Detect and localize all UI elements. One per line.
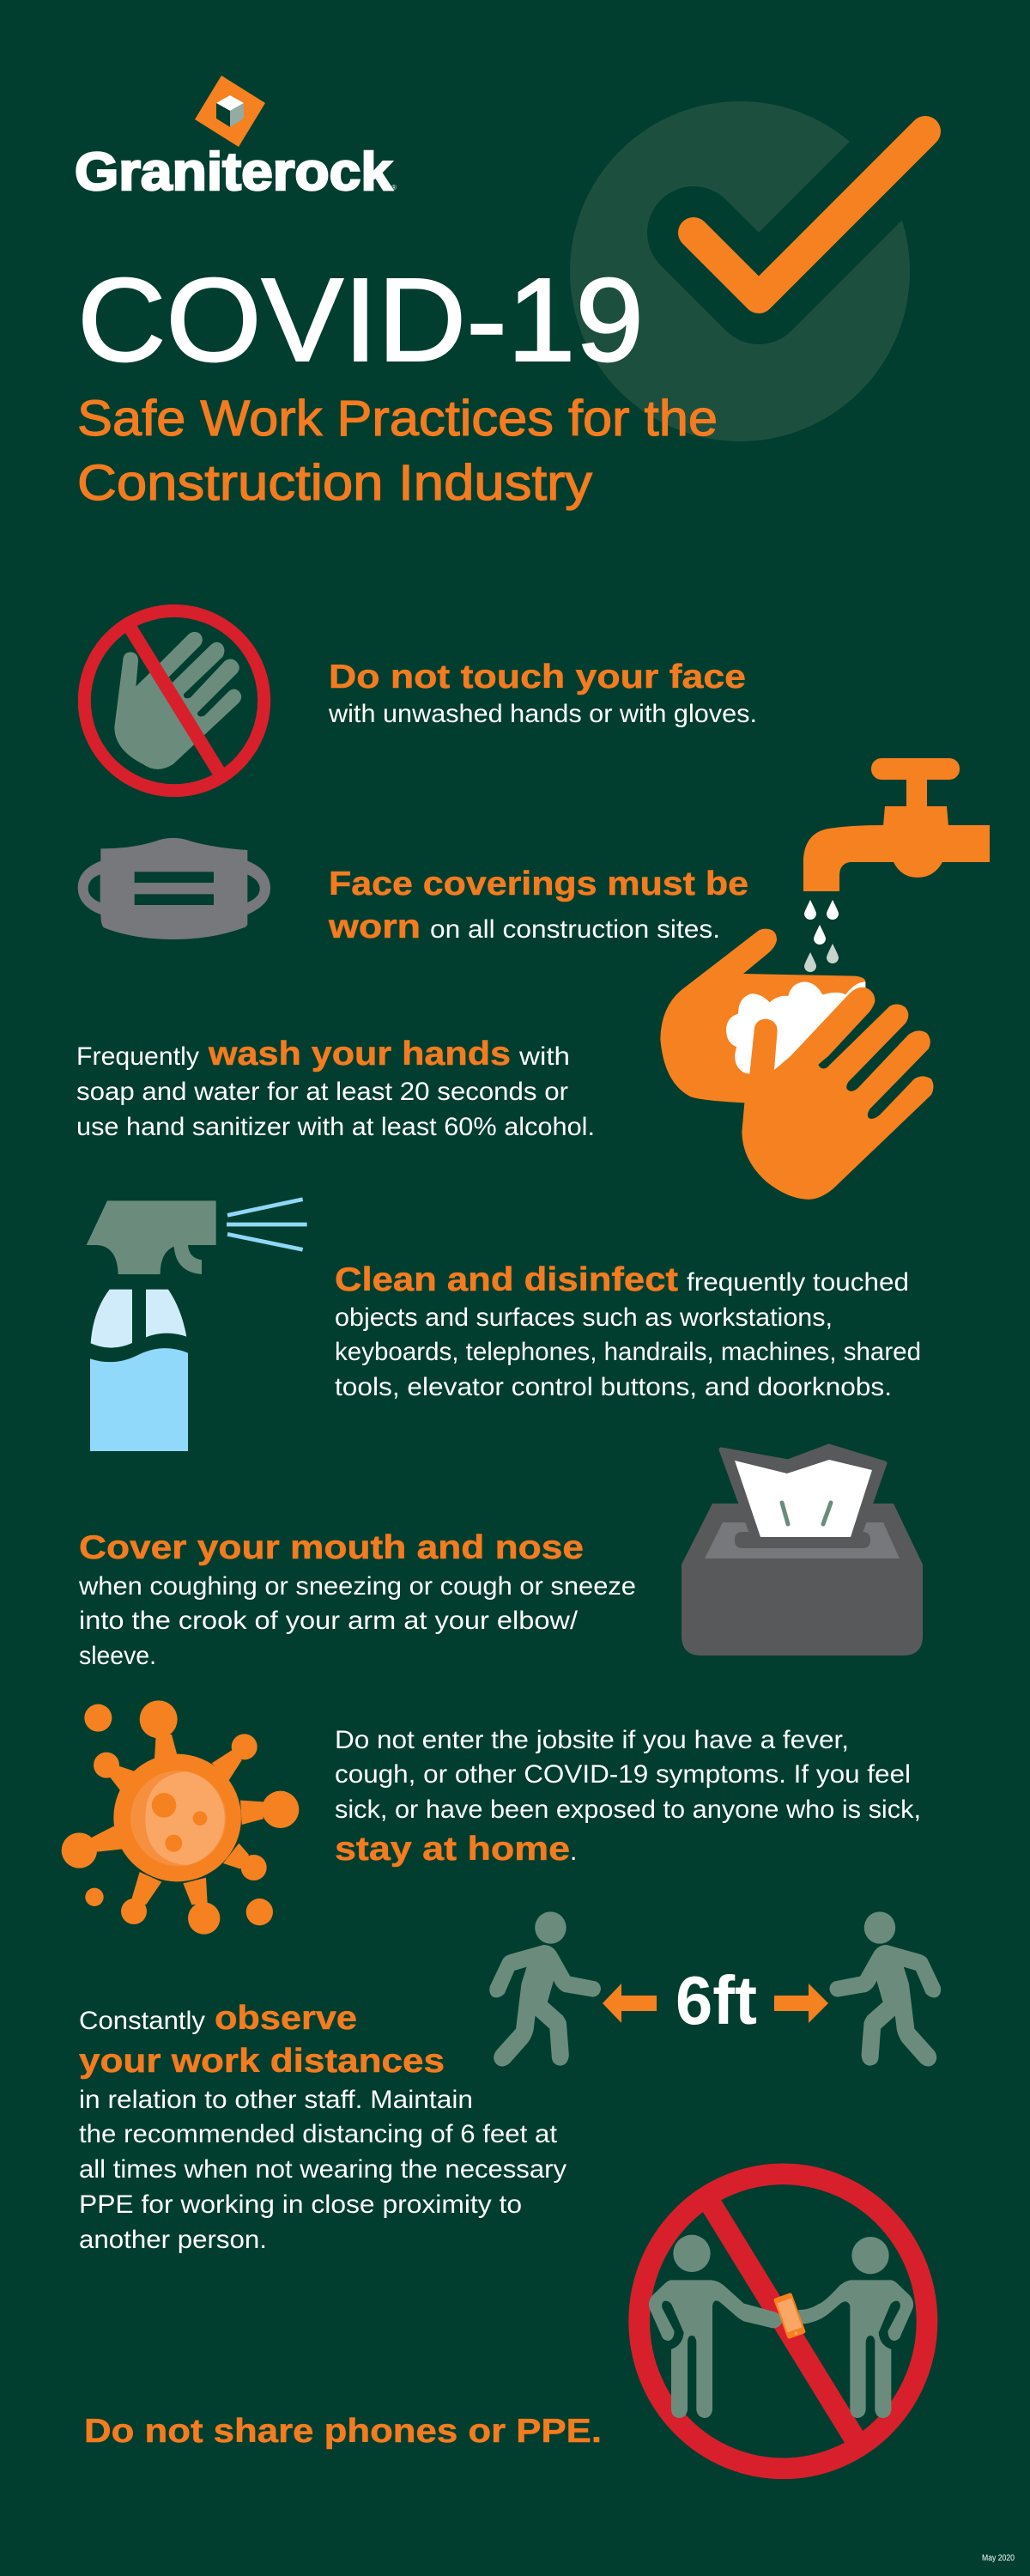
icon: do not share <box>639 2174 927 2469</box>
title: COVID-19 <box>77 254 644 386</box>
text: stay at home: sick, or have been exposed to anyone who is sick, <box>335 1795 921 1824</box>
text: face coverings <box>328 866 748 945</box>
text: stay at home: Do not enter the jobsite if you have a fever, <box>335 1726 849 1754</box>
icon: walking person left <box>489 1911 601 2067</box>
text: face coverings: worn <box>328 908 421 945</box>
text: stay at home <box>335 1726 921 1868</box>
icon: do not touch face <box>84 611 264 791</box>
icon: tissue box <box>682 1446 923 1656</box>
text: clean and disinfect: objects and surfaces such as workstations, <box>335 1303 833 1332</box>
text: face coverings: Face coverings must be <box>329 866 748 902</box>
text: clean and disinfect: keyboards, telephones, handrails, machines, shared <box>335 1338 921 1366</box>
text: wash your hands: soap and water for at least 20 seconds or <box>76 1078 568 1106</box>
text: observe your work distances: observe <box>215 2000 357 2037</box>
text: observe your work distances: your work distances <box>79 2043 445 2080</box>
text: observe your work distances: PPE for working in close proximity to <box>79 2190 522 2219</box>
text: stay at home: stay at home <box>335 1831 570 1868</box>
icon: washing hands <box>660 929 933 1200</box>
text: clean and disinfect: Clean and disinfect <box>335 1261 678 1298</box>
text: clean and disinfect <box>335 1261 921 1401</box>
subtitle: Construction Industry <box>77 455 592 511</box>
arrow: right <box>774 1984 828 2023</box>
text: do not touch your face: Do not touch your face <box>329 659 746 696</box>
subtitle: Safe Work Practices for the <box>77 391 718 447</box>
text: wash your hands: with <box>518 1042 570 1071</box>
logo: Graniterock <box>75 76 397 202</box>
arrow: left <box>603 1984 657 2023</box>
text: wash your hands: use hand sanitizer with at least 60% alcohol. <box>76 1113 595 1141</box>
text: cover your mouth and nose <box>78 1529 636 1670</box>
text: observe your work distances: in relation to other staff. Maintain <box>79 2086 473 2114</box>
icon: faucet <box>803 758 990 891</box>
text: cover your mouth and nose: sleeve. <box>79 1642 156 1670</box>
text: wash your hands: Frequently <box>76 1042 199 1071</box>
text: observe your work distances: Constantly <box>79 2007 205 2035</box>
text: observe your work distances <box>79 2000 566 2254</box>
logo: Graniterock: Graniterock <box>75 143 393 202</box>
icon: face mask <box>78 838 270 939</box>
text: do not touch your face: with unwashed hands or with gloves. <box>328 700 757 728</box>
text: wash your hands <box>76 1036 595 1141</box>
logo: Graniterock: ® <box>391 184 397 191</box>
text: do not share phones or PPE: Do not share phones or PPE. <box>84 2413 602 2450</box>
subtitle <box>77 391 718 511</box>
text: cover your mouth and nose: when coughing or sneezing or cough or sneeze <box>78 1572 636 1601</box>
icon: virus <box>62 1700 299 1935</box>
text: wash your hands: wash your hands <box>208 1036 511 1072</box>
distance label: 6ft <box>676 1962 757 2038</box>
text: observe your work distances: the recommended distancing of 6 feet at <box>79 2120 558 2148</box>
icon: walking person right <box>829 1911 941 2067</box>
text: do not touch your face <box>328 659 757 728</box>
icon: water drops <box>804 900 839 972</box>
text: observe your work distances: all times when not wearing the necessary <box>79 2155 566 2184</box>
text: clean and disinfect: tools, elevator control buttons, and doorknobs. <box>335 1373 892 1401</box>
text: clean and disinfect: frequently touched <box>687 1268 909 1297</box>
icon: checkmark badge <box>570 44 1013 441</box>
text: face coverings: on all construction sites. <box>430 915 720 944</box>
text: stay at home: . <box>570 1838 577 1866</box>
icon: spray bottle <box>87 1200 307 1451</box>
text: stay at home: cough, or other COVID-19 symptoms. If you feel <box>335 1760 911 1789</box>
text: observe your work distances: another person. <box>79 2226 267 2254</box>
text: cover your mouth and nose: into the crook of your arm at your elbow/ <box>79 1607 579 1635</box>
date note: May 2020 <box>982 2554 1015 2563</box>
text: cover your mouth and nose: Cover your mouth and nose <box>79 1529 584 1566</box>
